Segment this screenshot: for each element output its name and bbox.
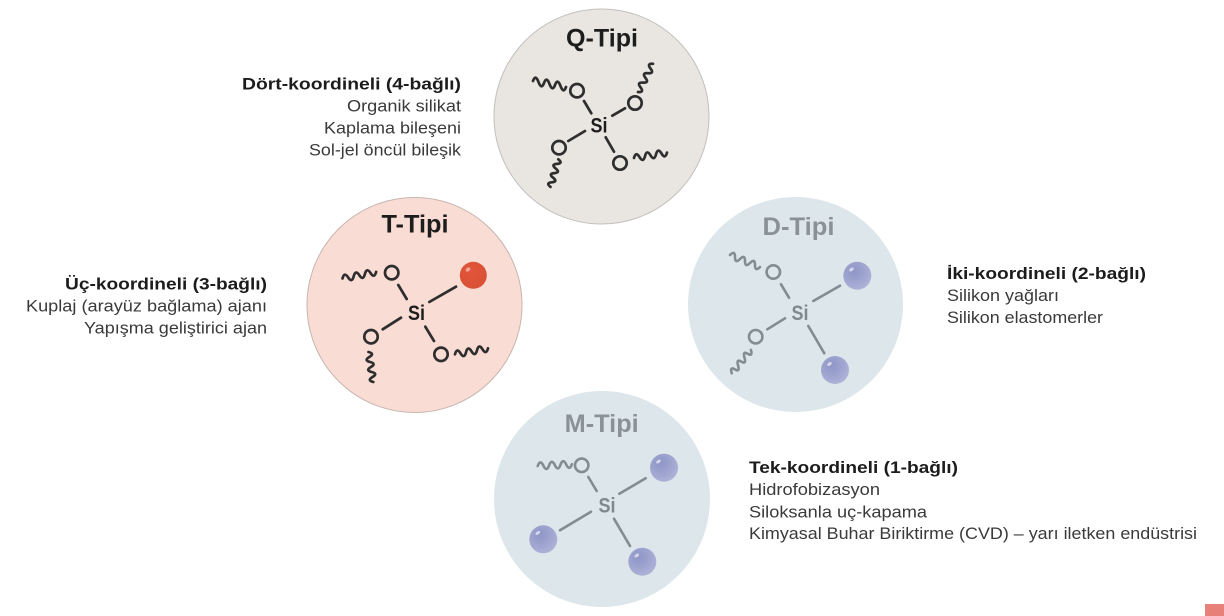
T alkyl chains xyxy=(342,270,488,382)
T circle background xyxy=(307,198,522,412)
Q oxygen atoms xyxy=(552,84,642,170)
M alkyl chain xyxy=(538,461,572,469)
M-type molecule circle xyxy=(494,391,710,607)
text block: D-type description: Silikon elastomerler xyxy=(947,309,1104,327)
T title: T-Tipi xyxy=(382,210,448,238)
text block: Q-type description: Kaplama bileşeni xyxy=(324,120,461,138)
M methyl groups xyxy=(529,454,678,576)
Q bonds xyxy=(568,101,625,152)
text block: Q-type description: Dört-koordineli (4-bağlı) xyxy=(242,74,461,94)
text block: T-type description: Yapışma geliştirici ajan xyxy=(84,320,267,338)
M silicon label: Si xyxy=(598,494,616,518)
corner marker xyxy=(1205,604,1224,616)
text block: Q-type description xyxy=(242,74,462,160)
T oxygen atoms xyxy=(364,266,448,361)
Q circle background xyxy=(494,9,709,224)
text block: M-type description: Hidrofobizasyon xyxy=(749,481,880,499)
M circle background xyxy=(494,391,710,607)
D oxygen atoms xyxy=(749,265,780,343)
T-type molecule circle xyxy=(307,198,522,412)
text block: M-type description: Kimyasal Buhar Biriktirme (CVD) – yarı iletken endüstrisi xyxy=(749,525,1197,543)
D-type molecule circle xyxy=(688,197,903,412)
M bonds xyxy=(560,477,646,546)
T bonds xyxy=(383,285,456,341)
Q silicon label: Si xyxy=(590,114,608,138)
M title: M-Tipi xyxy=(565,410,639,438)
D bonds xyxy=(767,284,840,353)
text block: T-type description: Üç-koordineli (3-bağlı) xyxy=(65,274,267,294)
Q alkyl chains xyxy=(533,64,667,187)
text block: D-type description: Silikon yağları xyxy=(947,287,1059,305)
text block: M-type description: Tek-koordineli (1-bağlı) xyxy=(749,458,958,477)
text block: T-type description: Kuplaj (arayüz bağlama) ajanı xyxy=(26,298,267,316)
D silicon label: Si xyxy=(792,302,808,325)
text block: M-type description xyxy=(749,458,1197,543)
D circle background xyxy=(688,197,903,412)
D alkyl chains xyxy=(730,253,760,373)
D title: D-Tipi xyxy=(762,213,834,241)
T silicon label: Si xyxy=(408,302,425,325)
D methyl groups xyxy=(821,262,871,384)
text block: T-type description xyxy=(26,274,267,338)
M oxygen atom xyxy=(575,459,588,472)
text block: Q-type description: Organik silikat xyxy=(347,98,461,116)
text block: Q-type description: Sol-jel öncül bileşik xyxy=(309,142,462,160)
text block: D-type description: İki-koordineli (2-bağlı) xyxy=(947,264,1146,283)
Q title: Q-Tipi xyxy=(566,24,638,52)
Q-type molecule circle xyxy=(494,9,709,224)
text block: M-type description: Siloksanla uç-kapama xyxy=(749,504,928,522)
text block: D-type description xyxy=(947,264,1146,327)
T red functional group xyxy=(460,262,487,289)
